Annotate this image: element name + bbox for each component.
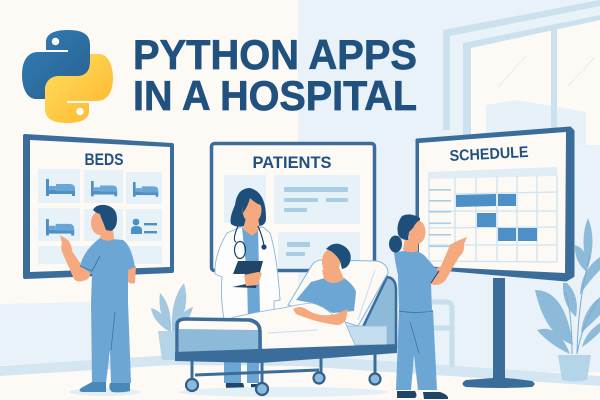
shirt: [80, 238, 135, 305]
plant: right: [535, 218, 600, 382]
doctor shoes: [226, 383, 262, 392]
panel: schedule board: [417, 128, 573, 388]
mattress right end: [340, 326, 387, 345]
doctor fringe: [243, 194, 263, 213]
pointing arm: [429, 237, 467, 285]
patient record cards: [224, 175, 360, 268]
window: [443, 0, 600, 146]
figure: doctor: [215, 188, 280, 392]
face: [91, 211, 109, 235]
hair and ponytail: [398, 214, 420, 240]
pants: [396, 310, 437, 390]
plant: left: [151, 283, 193, 360]
title: IN A HOSPITAL: [133, 72, 417, 119]
patient arm: [293, 307, 348, 325]
shoes: [80, 382, 130, 392]
scrubs: [242, 228, 260, 322]
bed base legs and wheels: [186, 350, 380, 395]
schedule bars: [456, 194, 537, 241]
panel: patients board: [212, 144, 374, 270]
blanket: [231, 303, 358, 355]
patient neck: [322, 265, 344, 283]
plant pot: [158, 331, 176, 360]
doctor legs: [224, 350, 259, 383]
bed frame rail: [175, 344, 397, 363]
heading: beds: BEDS: [84, 151, 124, 169]
doctor hand: [244, 272, 262, 286]
right arm: [127, 266, 136, 284]
heading: patients: PATIENTS: [252, 153, 332, 172]
trousers: [91, 302, 131, 383]
doctor face: [242, 197, 262, 223]
neck: [243, 218, 260, 236]
doctor hair back: [230, 188, 266, 227]
icon: person card: [131, 219, 157, 234]
heading: schedule: SCHEDULE: [449, 144, 529, 165]
shirt: [394, 250, 439, 312]
figure: nurse with ponytail: [389, 214, 467, 399]
patient hair: [326, 244, 351, 269]
hair: [93, 205, 117, 231]
footboard rail: [177, 319, 260, 355]
neck: [100, 228, 114, 241]
icon: bed symbols: [46, 179, 158, 235]
headboard: [360, 277, 396, 347]
footboard and lower mattress: [179, 329, 261, 354]
left arm pointing: [60, 235, 92, 282]
board stand: [462, 278, 534, 388]
patient record lines: [284, 187, 348, 256]
chair: [432, 302, 452, 367]
bed status cells: [38, 169, 162, 264]
patient face: [322, 249, 340, 275]
hospital bed with patient: [175, 244, 397, 397]
pillow back rest: [288, 260, 388, 326]
schedule table: [428, 167, 557, 262]
lab coat: [215, 227, 280, 325]
shoes: [397, 391, 448, 399]
tablet: [232, 261, 263, 288]
plant pot: [558, 355, 591, 382]
figure: male nurse: [60, 205, 141, 396]
panel: beds board: [25, 136, 172, 277]
stethoscope: [234, 226, 266, 258]
title: [133, 31, 417, 119]
neck and face: [403, 238, 418, 252]
icon: python logo: [22, 30, 113, 123]
patient shirt: [296, 278, 356, 313]
title: PYTHON APPS: [133, 31, 417, 78]
